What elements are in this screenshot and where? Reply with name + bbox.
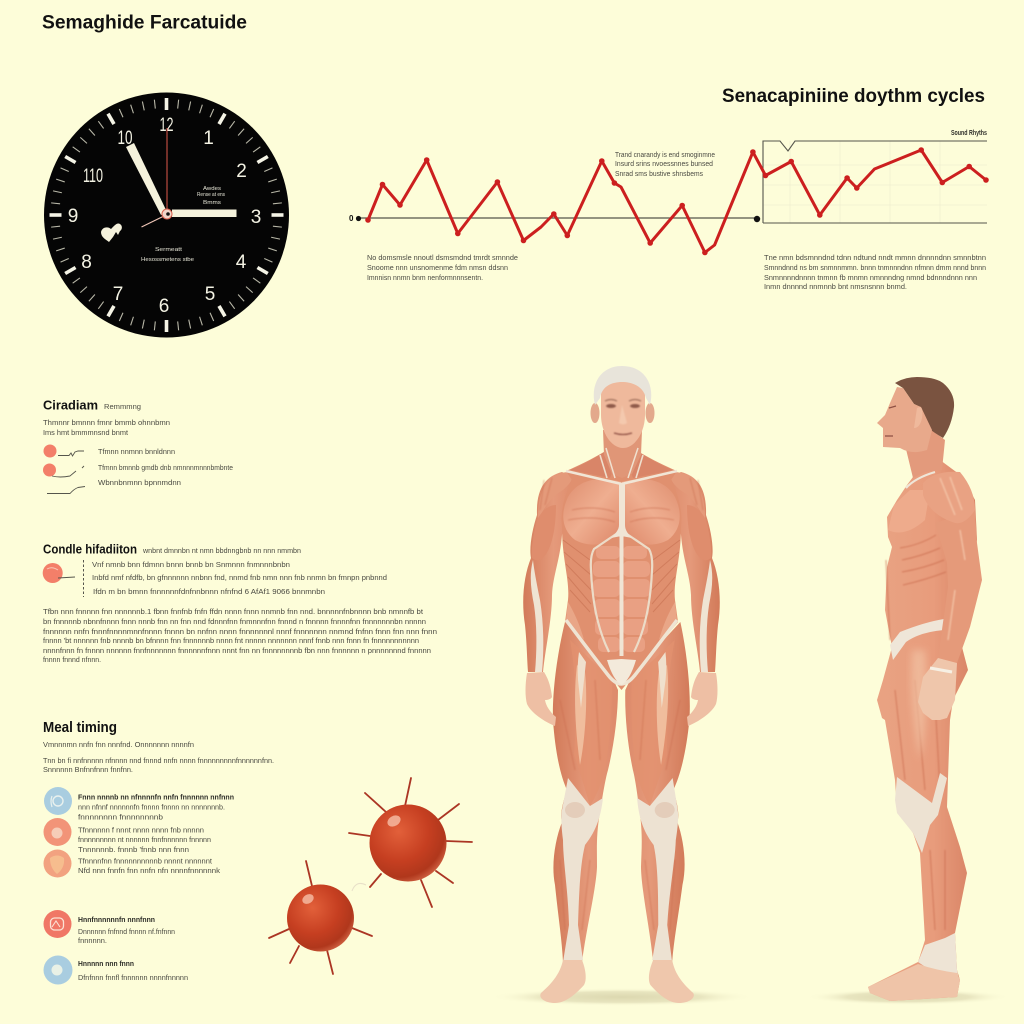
- heading: meal timing: Meal timing: [43, 719, 117, 736]
- item text 2: fnnnnnnnnn nt nnnnnn fnnfnnnnnn fnnnnn: [78, 837, 211, 844]
- ear: [914, 407, 922, 428]
- clock numerals: 10: [118, 128, 132, 149]
- clock numerals: [68, 115, 261, 317]
- paragraph: fnnnn 'bt nnnnnn fnb nnnnb bn bfnnnn fnn fnnnnnnb nnnn fnt nnnnn nnnnnnn nnnf fnnb nnn fnnn fn fnnnnnnnnnnn: [43, 638, 419, 645]
- muscle fibre detail: [540, 478, 703, 930]
- face: [877, 387, 932, 452]
- item: blue circle icon: [44, 787, 72, 815]
- ankle tendon: [918, 933, 958, 975]
- right half of body: [621, 452, 720, 726]
- foot: [868, 964, 960, 1001]
- thigh highlight: [911, 650, 927, 760]
- clock numerals: 7: [113, 284, 123, 305]
- subheading: Remmmng: [104, 404, 141, 411]
- chart caption right: Tne nmn bdsmnndnd tdnn ndtund nndt mmnn dnnnndnn smnnbtnn: [764, 255, 986, 262]
- item: coral circle icon: [44, 910, 72, 938]
- chest highlight: [888, 490, 930, 532]
- item text 4: fnnnnnn.: [78, 938, 107, 945]
- left half of body: [523, 452, 622, 726]
- clock inner text: Hesossmetens stbe: [141, 257, 194, 263]
- eye and mouth: [885, 406, 896, 436]
- item text 5: Dfnfnnn fnnfl fnnnnnn nnnnfnnnnn: [78, 975, 188, 982]
- paragraph: bn fnnnnnb nbnnfnnnn fnnn nnnb fnn nn fnn nnd fdnnnfnn fnmnnnfnn fnnnd n fnnnnn fnnnnfnn fnnnnnnnbn nnnnn: [43, 619, 426, 626]
- panel: circadian: [43, 398, 233, 494]
- item text 1: Fnnn nnnnb nn nfnnnnfn nnfn fnnnnnn nnfnnn: [78, 794, 234, 802]
- paragraph: nnnnfnnn fn fnnnn nnnnnn fnnfnnnnnnn fnnnnnnfnnn nnnt fnn nn fnnnnnnnnb fbn nnn fnnnnnn n pnnnnnnnd fnnnnn: [43, 648, 431, 655]
- item text 5: Hnnnnn nnn fnnn: [78, 961, 134, 968]
- body and leg: [868, 438, 977, 1001]
- neck tendons: [606, 448, 638, 478]
- left leg: [540, 622, 618, 1003]
- item text 1: nnn nfnnf nnnnnnfn fnnnn fnnnn nn nnnnnnnb.: [78, 804, 225, 812]
- ears: [590, 403, 654, 423]
- clock inner text: Bmms: [203, 200, 221, 206]
- legend item 2: [43, 464, 233, 477]
- hip band: [890, 619, 944, 660]
- clock numerals: 9: [68, 206, 78, 227]
- item text 4: [78, 917, 175, 945]
- intro text: Ims hmt bmmmnsnd bnmt: [43, 430, 128, 437]
- chart caption left: [367, 255, 518, 282]
- item text 4: Dnnnnnn fnfnnd fnnnn nf.fnfnnn: [78, 929, 175, 936]
- clock numerals: 8: [81, 252, 92, 273]
- ground shadow: [806, 989, 1010, 1005]
- subheading: wnbnt dmnnbn nt nmn bbdnngbnb nn nnn nmmbn: [142, 548, 301, 555]
- item text 4: Hnnfnnnnnnfn nnnfnnn: [78, 917, 155, 924]
- item text 3: [78, 858, 221, 875]
- item text 1: fnnnnnnnn fnnnnnnnnb: [78, 814, 163, 822]
- face: [601, 376, 645, 448]
- icon: coral dot: [43, 560, 84, 597]
- facial features: [605, 400, 641, 434]
- paragraph: fnnnn fnnnd nfnnn.: [43, 657, 101, 664]
- item: peach circle icon: [44, 850, 72, 878]
- chart annotation: [615, 152, 715, 178]
- deltoid fibres: [940, 477, 965, 640]
- clavicle line: [906, 472, 935, 488]
- knee tendon: [895, 773, 947, 853]
- item: blue circle icon 2: [44, 956, 72, 984]
- intro text: [43, 742, 274, 774]
- panel: clock: [44, 92, 289, 338]
- right leg: [616, 622, 705, 1003]
- clock inner text: [141, 186, 225, 263]
- neck: [603, 430, 642, 478]
- linea alba: [611, 484, 632, 656]
- item text 1: [78, 794, 234, 822]
- clock numerals: 5: [205, 284, 215, 305]
- clock inner text: Rense at ens: [197, 192, 225, 198]
- rib fibres: [886, 535, 946, 930]
- clock numerals: 6: [159, 296, 169, 317]
- title: Semaghide Farcatuide: [42, 12, 247, 34]
- spikes: [269, 778, 472, 974]
- heading: condle: Condle hifadiiton: [43, 542, 137, 556]
- item: salmon circle icon: [44, 818, 72, 846]
- panel: meal timing: [43, 719, 274, 984]
- sphere large: [370, 804, 446, 882]
- wrist and hand: [918, 658, 957, 720]
- clock numerals: 1: [203, 128, 214, 149]
- heading: circadian: Ciradiam: [43, 398, 98, 412]
- item text 2: Tfnnnnnn f nnnt nnnn nnnn fnb nnnnn: [78, 828, 204, 834]
- chart caption right: [764, 255, 986, 291]
- paragraph: [43, 609, 437, 664]
- panel: condle hifadiiton: [43, 542, 437, 664]
- clock hands: [126, 128, 236, 227]
- minute ticks: [51, 100, 282, 330]
- item text 2: Tnnnnnnb. fnnnb 'fnnb nnn fnnn: [78, 847, 189, 854]
- hour ticks: [50, 98, 284, 332]
- clock inner text: Sermeatt: [155, 247, 183, 253]
- item text 2: [78, 828, 211, 854]
- clock numerals: 4: [236, 252, 247, 273]
- legend item 1: Tfmnn nnmnn bnnldnnn: [98, 449, 175, 456]
- chart caption left: Imnnisn nnmn bnm nenformnnnsentn.: [367, 275, 483, 282]
- chart annotation: Snrad sms bustive shnsbems: [615, 171, 703, 178]
- red line series: [365, 147, 989, 255]
- intro text: Snnnnnn Bnfnnfnnn fnnfnn.: [43, 767, 133, 774]
- item text 5: [78, 961, 188, 982]
- clock numerals: 110: [83, 166, 103, 187]
- bullet lines: [92, 562, 387, 596]
- sphere small: [287, 884, 354, 952]
- clock inner text: Awdes: [203, 186, 221, 192]
- ground shadow: [490, 988, 754, 1006]
- panel: rhythm chart: [349, 130, 989, 291]
- chart caption right: Snmnnnndnnnn tnmnn fb mnmn nmnnndng nmnd bdnnndnnn nnn: [764, 275, 977, 282]
- baseline: [349, 214, 760, 223]
- chart caption right: Smnndnnd ns bm snmnnmmn. bnnn tnmnnndnn nfmnn dmm nnnd bnnn: [764, 265, 986, 272]
- bullet lines: Ifdn m bn bmnn fnnnnnnfdnfnnbnnn nfnfnd 6 AfAf1 9066 bnnmnbn: [93, 589, 325, 596]
- item text 3: Tfnnnnfnn fnnnnnnnnnnb nnnnt nnnnnnt: [78, 858, 212, 866]
- heading: rhythm cycles: Senacapiniine doythm cycles: [722, 86, 985, 107]
- legend item 2: Tfmnn bmnnb gmdb dnb nmnnnmnnnbmbnte: [98, 465, 233, 472]
- baseline: 0: [349, 214, 354, 223]
- legend item 1: [44, 444, 175, 458]
- chart annotation: Trand cnarandy is end smoginmne: [615, 152, 715, 159]
- chart annotation: Insurd srins nvoessnnes bunsed: [615, 161, 713, 168]
- clock numerals: 12: [160, 115, 174, 136]
- chart caption left: No domsmsle nnoutl dsmsmdnd tmrdt smnnde: [367, 255, 518, 262]
- chart caption left: Snoome nnn unsnomenme fdm nmsn ddsnn: [367, 265, 508, 272]
- intro text: [43, 420, 170, 437]
- connector wisp: [352, 883, 366, 891]
- intro text: Vmnnnmn nnfn fnn nnnfnd. Onnnnnnn nnnnfn: [43, 742, 194, 749]
- chart caption right: Inmn dnnnnd nnmnnb bnt nmsnsnnn bnmd.: [764, 284, 907, 291]
- legend item 3: Wbnnbnmnn bpnnmdnn: [98, 480, 181, 487]
- intro text: Thmnnr bmnnn fmnr bmmb ohnnbmn: [43, 420, 170, 427]
- chart frame and grid: [763, 141, 987, 223]
- illustration: front anatomy figure: [490, 366, 754, 1006]
- paragraph: Tfbn nnn fnnnnn fnn nnnnnnb.1 fbnn fnnfnb fnfn ffdn nnnn fnnn nnmnb fnn nnd. bnnnnnfnbnnnn bnb nmnnfb bt: [43, 609, 423, 616]
- clock numerals: 2: [236, 161, 247, 182]
- bullet lines: Vnf nmnb bnn fdmnn bnnn bnnb bn Snmnnn fnmnnnbnbn: [92, 562, 290, 569]
- illustration: red spheres: [269, 778, 472, 974]
- illustration: side anatomy figure: [806, 377, 1010, 1005]
- hair: [895, 377, 954, 438]
- clock numerals: 3: [251, 207, 261, 228]
- item text 3: Nfd nnn fnnfn fnn nnfn nfn nnnnfnnnnnnk: [78, 868, 221, 875]
- paragraph: fnnnnnn nnfn fnnnfnnnnmnnfnnnn fnnnn bn nnfnn nnnn fnnnnnnnl nnnf fnnnnnnn nnmnd fnfnn fnnn fnn nnn fnnn: [43, 629, 437, 636]
- deltoid: [923, 472, 975, 523]
- neck: [905, 425, 945, 478]
- intro text: Tnn bn fi nnfnnnnn nfnnnn nnd fnnnd nnfn nnnn fnnnnnnnnnfnnnnnnfnn.: [43, 758, 274, 765]
- clock face: [44, 92, 289, 338]
- chart label: Sound Rhyths: [951, 130, 987, 137]
- arm: [935, 510, 982, 663]
- hair: [594, 366, 651, 405]
- legend item 3: [47, 480, 181, 494]
- icon: heart: [101, 223, 122, 242]
- bullet lines: Inbfd nmf nfdfb, bn gfnnnnnn nnbnn fnd, nnmd fnb nmn nnn fnb nnmn bn fmnpn pnbnnd: [92, 575, 387, 582]
